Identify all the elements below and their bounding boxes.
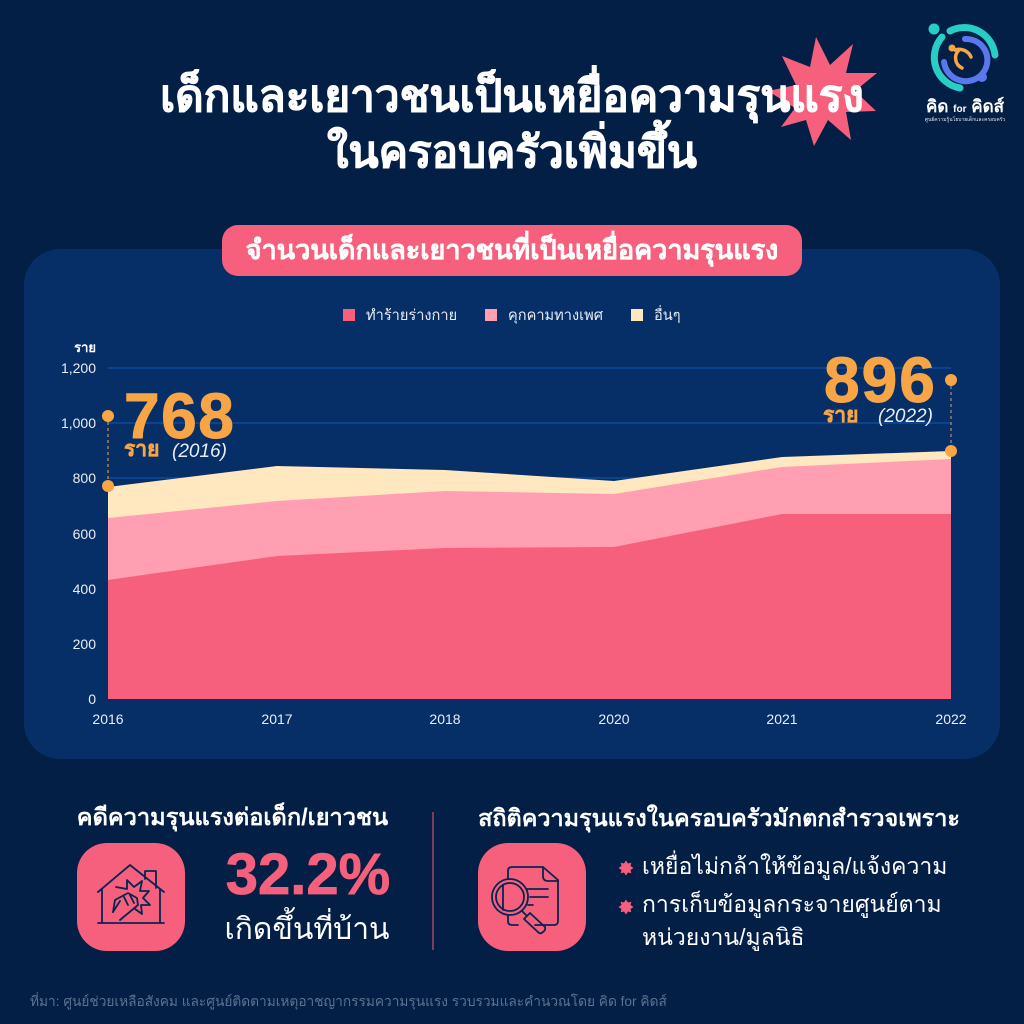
y axis labels: [61, 360, 96, 707]
x axis labels: [92, 711, 967, 727]
icon: document with magnifier: [478, 843, 586, 951]
marker 2016: [102, 410, 114, 492]
x axis labels: 2021: [766, 711, 798, 727]
marker 2022: [945, 374, 957, 457]
callout 896: 896: [824, 344, 937, 416]
legend item: physical assault: ทำร้ายร่างกาย: [366, 308, 457, 324]
callout 768: ราย: [124, 438, 159, 461]
y axis labels: 0: [88, 691, 96, 707]
chart heading pill: จำนวนเด็กและเยาวชนที่เป็นเหยื่อความรุนแรง: [246, 235, 778, 265]
x axis labels: 2017: [261, 711, 293, 727]
bullet list: [618, 850, 947, 951]
legend item: sexual harassment: คุกคามทางเพศ: [508, 308, 603, 324]
left heading: คดีความรุนแรงต่อเด็ก/เยาวชน: [77, 805, 388, 831]
legend: [343, 305, 681, 324]
x axis labels: 2016: [92, 711, 124, 727]
area: sexual harassment: [108, 459, 951, 699]
logo mark: [928, 24, 995, 88]
y axis labels: 200: [73, 636, 96, 652]
stacked area chart: [61, 340, 967, 727]
y axis labels: 400: [73, 581, 96, 597]
source: ที่มา: ศูนย์ช่วยเหลือสังคม และศูนย์ติดตามเหตุอาชญากรรมความรุนแรง รวบรวมและคำนวณโดย คิด for คิดส์: [30, 994, 667, 1009]
legend item: other: [631, 305, 681, 324]
area: physical assault: [108, 514, 951, 699]
x axis labels: 2022: [935, 711, 967, 727]
bullet 1: เหยื่อไม่กล้าให้ข้อมูล/แจ้งความ: [642, 853, 947, 879]
y axis labels: 600: [73, 526, 96, 542]
logo: คิด for คิดส์: [925, 24, 1005, 123]
right heading: สถิติความรุนแรงในครอบครัวมักตกสำรวจเพราะ: [478, 805, 960, 831]
bullet 2: [618, 890, 942, 951]
stat 32.2%: 32.2%: [226, 842, 390, 907]
divider: [432, 812, 434, 950]
y axis unit: ราย: [74, 340, 96, 355]
title: เด็กและเยาวชนเป็นเหยื่อความรุนแรง: [160, 72, 864, 121]
callout 896: (2022): [878, 406, 933, 427]
y axis labels: 1,200: [61, 360, 96, 376]
logo: คิด for คิดส์: ศูนย์ความรู้นโยบายเด็กและครอบครัว: [925, 117, 1005, 123]
callout 768: (2016): [172, 441, 227, 462]
callout 768: 768: [124, 380, 235, 452]
legend item: other: อื่นๆ: [654, 308, 681, 324]
stat 32.2%: [224, 842, 390, 946]
icon: house with hitting hand: [77, 843, 185, 951]
chart panel: [24, 249, 1000, 759]
stat 32.2%: เกิดขึ้นที่บ้าน: [224, 913, 390, 946]
x axis labels: 2020: [598, 711, 630, 727]
chart heading pill: [222, 225, 802, 276]
bullet 2: หน่วยงาน/มูลนิธิ: [642, 924, 805, 950]
area: other: [108, 451, 951, 699]
title: [160, 65, 864, 177]
y axis labels: 1,000: [61, 415, 96, 431]
bullet 2: การเก็บข้อมูลกระจายศูนย์ตาม: [642, 891, 942, 917]
decorative star behind title: [772, 37, 877, 146]
title: ในครอบครัวเพิ่มขึ้น: [327, 128, 697, 177]
callout 896: ราย: [823, 404, 858, 427]
y axis labels: 800: [73, 470, 96, 486]
x axis labels: 2018: [429, 711, 461, 727]
logo: คิด for คิดส์: คิด for คิดส์: [926, 97, 1004, 116]
